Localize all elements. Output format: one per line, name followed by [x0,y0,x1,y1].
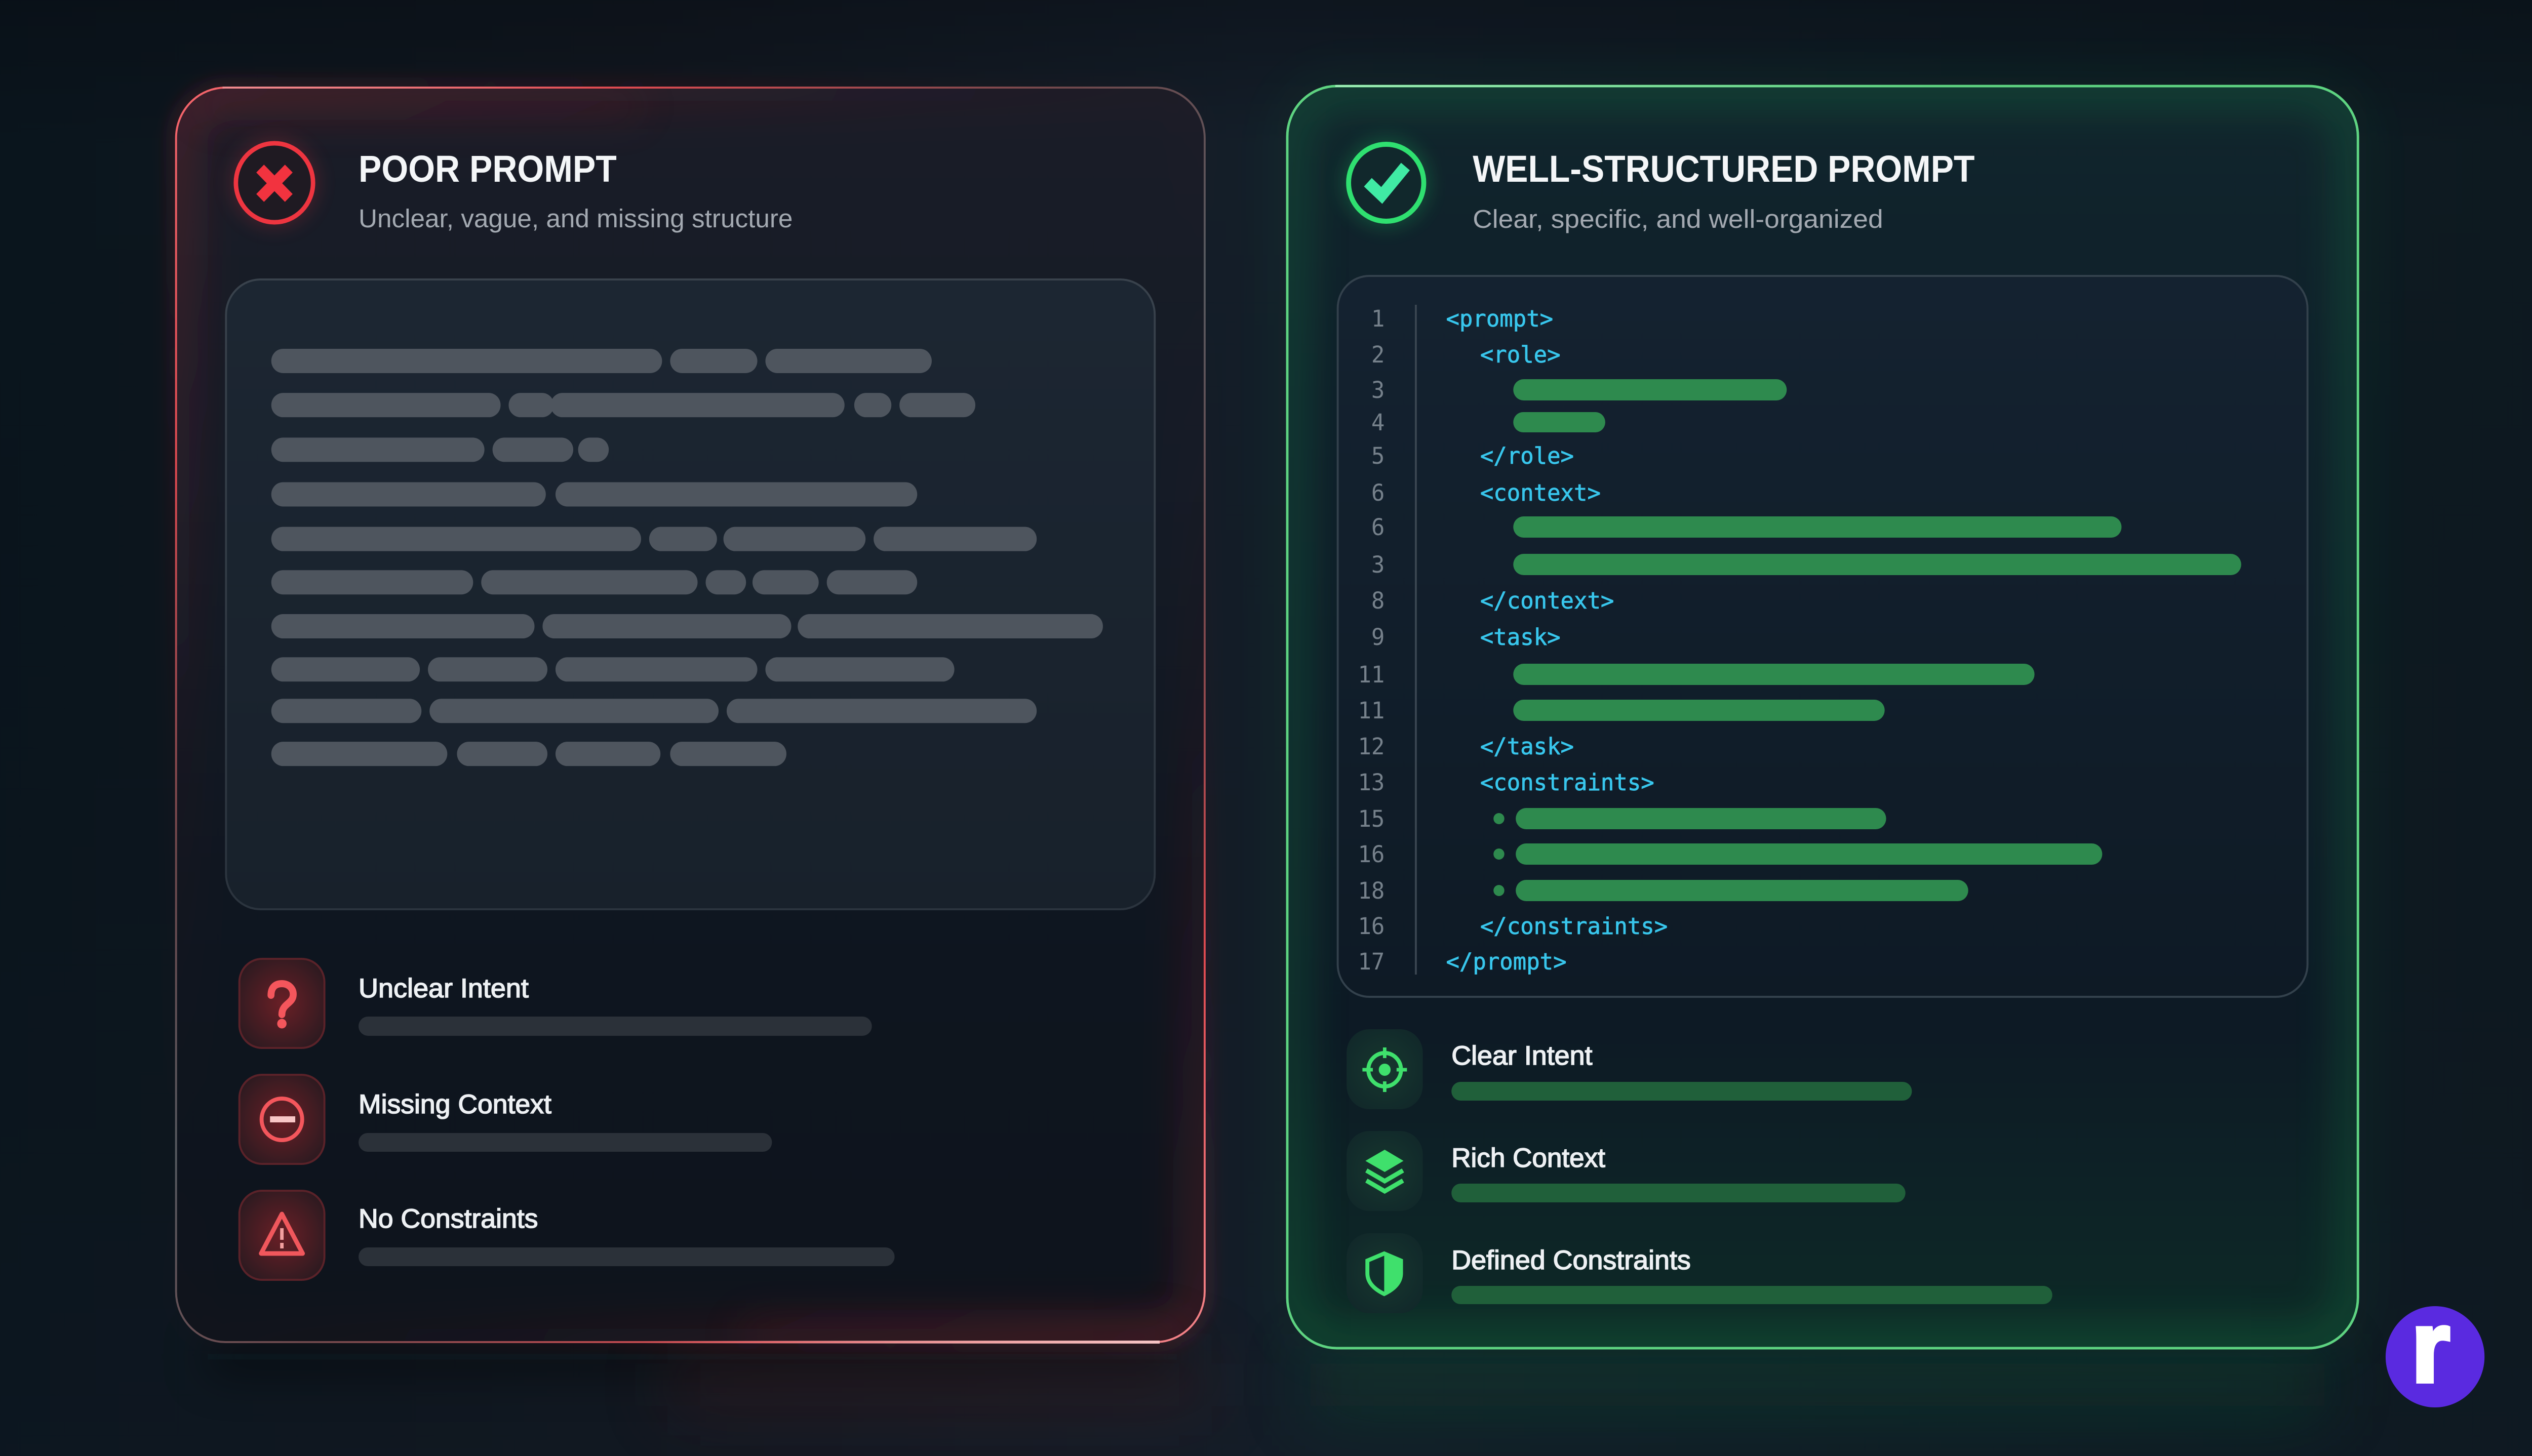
line numbers: 13 [1358,770,1384,796]
subtitle: well-structured prompt: Clear, specific, and well-organized [1473,204,1883,233]
line numbers: 11 [1358,698,1384,724]
bar [1451,1082,1912,1101]
subtitle: poor prompt: Unclear, vague, and missing structure [359,204,793,233]
line numbers: 11 [1358,662,1384,688]
icon: minus circle [240,1075,325,1164]
panel: vague text block [226,279,1155,909]
icon: green check in circle [1341,137,1431,228]
panel: well-structured prompt [1287,86,2358,1348]
label: clear intent: Clear Intent [1451,1041,1593,1071]
logo badge [2386,1290,2484,1407]
line numbers: 16 [1358,842,1384,868]
icon: red cross in circle [230,137,319,228]
heading: poor prompt: POOR PROMPT [359,148,617,190]
xml tags: <role> [1480,342,1561,368]
line numbers: 6 [1371,515,1384,541]
label: no constraints: No Constraints [359,1204,538,1234]
xml tags: </context> [1480,588,1614,614]
logo badge: r [2411,1290,2450,1403]
bar [359,1133,772,1152]
line numbers: 6 [1371,480,1384,506]
line numbers: 15 [1358,806,1384,832]
line numbers: 9 [1371,625,1384,651]
label: defined constraints: Defined Constraints [1451,1245,1691,1275]
label: unclear intent: Unclear Intent [359,974,529,1003]
xml tags [1446,306,1668,975]
line numbers: 18 [1358,878,1384,904]
line numbers: 1 [1371,306,1384,332]
bar [1451,1184,1906,1202]
feature: clear intent [1347,1029,1912,1109]
line numbers: 3 [1371,552,1384,578]
icon: target [1347,1029,1423,1109]
feature: defined constraints [1347,1233,2052,1313]
label: rich context: Rich Context [1451,1143,1605,1173]
line numbers: 8 [1371,588,1384,614]
line numbers: 16 [1358,914,1384,940]
feature: missing context [240,1075,772,1164]
line numbers: 17 [1358,949,1384,975]
feature: no constraints [240,1191,895,1280]
line numbers: 2 [1371,342,1384,368]
redacted text lines [271,349,1103,766]
xml tags: </prompt> [1446,949,1567,975]
xml tags: </task> [1480,734,1574,760]
icon: warning triangle [240,1191,325,1280]
feature: unclear intent [240,959,872,1048]
line numbers: 5 [1371,443,1384,469]
bar [359,1017,872,1036]
xml tags: </role> [1480,443,1574,469]
xml tags: <constraints> [1480,770,1654,796]
icon: question mark [240,959,325,1048]
xml tags: <prompt> [1446,306,1553,332]
heading: well-structured prompt: WELL-STRUCTURED PROMPT [1473,148,1974,190]
bar [1451,1286,2052,1304]
line numbers [1358,306,1384,975]
icon: layers [1347,1131,1423,1211]
panel: poor prompt [176,88,1205,1347]
panel: code block [1338,276,2308,997]
line numbers: 4 [1371,410,1384,436]
line numbers: 12 [1358,734,1384,760]
xml tags: </constraints> [1480,914,1668,940]
icon: shield [1347,1233,1423,1313]
feature: rich context [1347,1131,1906,1211]
label: missing context: Missing Context [359,1089,551,1119]
green content bars [1493,379,2241,901]
line numbers: 3 [1371,378,1384,403]
bar [359,1247,895,1266]
xml tags: <context> [1480,480,1601,506]
xml tags: <task> [1480,625,1561,651]
